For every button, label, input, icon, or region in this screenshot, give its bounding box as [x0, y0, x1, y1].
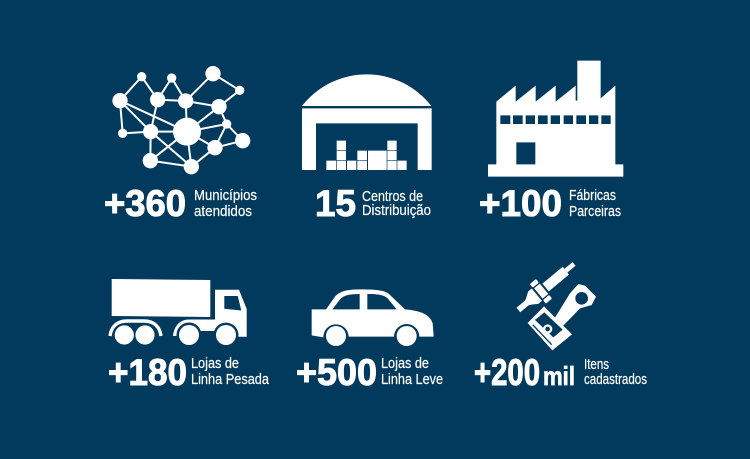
label: Itens cadastrados: cadastrados: [584, 371, 647, 388]
panel: heavy line stores: [108, 279, 270, 393]
icon: network map: [112, 66, 250, 174]
number: 15: 15: [315, 182, 356, 224]
panel: catalog items: [474, 254, 647, 393]
number: +360: +360: [104, 182, 186, 224]
label: Municípios atendidos: atendidos: [194, 203, 252, 220]
panel: municipalities: [104, 66, 257, 224]
label: Lojas de Linha Leve: [381, 355, 443, 388]
icon: factory: [488, 61, 623, 177]
panel: distribution centers: [302, 74, 432, 224]
label: Municípios atendidos: Municípios: [194, 187, 257, 204]
label: Itens cadastrados: [584, 356, 647, 388]
number: +200 mil: mil: [543, 361, 575, 391]
label: Municípios atendidos: [194, 187, 257, 220]
label: Fábricas Parceiras: Fábricas: [569, 187, 616, 204]
icon: car: [312, 289, 434, 346]
label: Centros de Distribuição: [362, 188, 431, 219]
label: Centros de Distribuição: Centros de: [362, 188, 423, 205]
number: +500: +500: [296, 351, 377, 393]
icon: spark plug and piston: [510, 254, 596, 350]
label: Lojas de Linha Pesada: [191, 355, 270, 388]
icon: truck: [110, 279, 247, 345]
number: +200 mil: +200: [474, 351, 540, 393]
panel: factories: [479, 61, 623, 224]
number: +100: +100: [479, 182, 562, 224]
label: Centros de Distribuição: Distribuição: [362, 202, 431, 219]
label: Fábricas Parceiras: Parceiras: [569, 203, 621, 220]
label: Lojas de Linha Leve: Linha Leve: [381, 371, 443, 388]
label: Itens cadastrados: Itens: [584, 356, 609, 373]
panel: light line stores: [296, 289, 443, 393]
label: Lojas de Linha Pesada: Lojas de: [191, 355, 239, 372]
icon: warehouse: [302, 74, 432, 170]
label: Lojas de Linha Pesada: Linha Pesada: [191, 371, 270, 388]
label: Fábricas Parceiras: [569, 187, 621, 220]
label: Lojas de Linha Leve: Lojas de: [381, 355, 429, 372]
number: +180: +180: [108, 351, 187, 393]
